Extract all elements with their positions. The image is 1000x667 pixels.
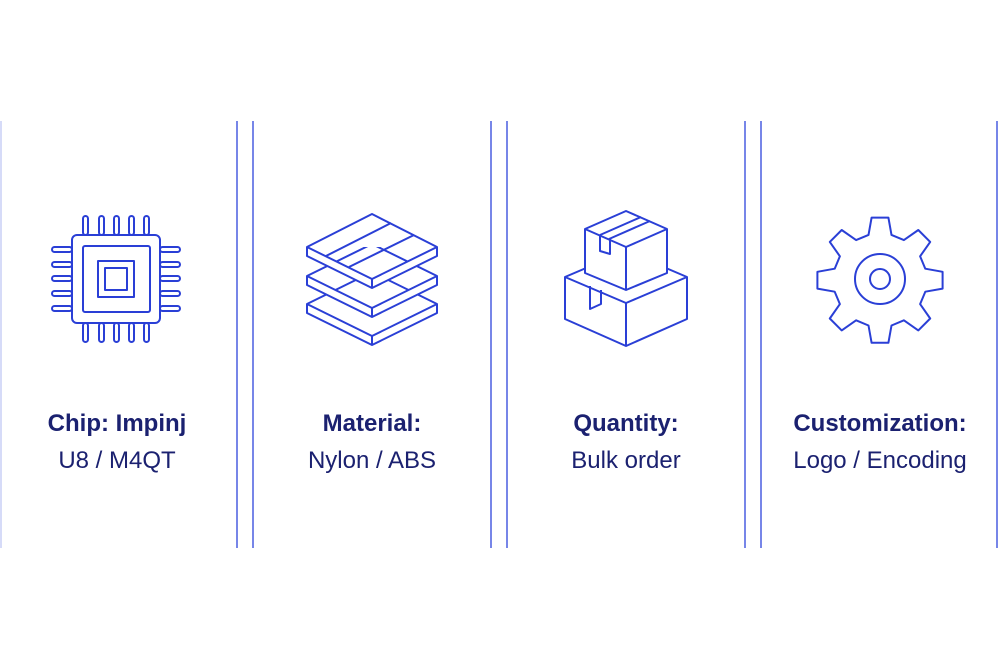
- text: chip: [48, 410, 186, 474]
- text: chip: U8 / M4QT: [58, 447, 176, 474]
- icon: gear: [817, 218, 943, 343]
- icon: chip: [52, 216, 180, 342]
- text: material: Nylon / ABS: [308, 447, 436, 474]
- text: material: [308, 410, 436, 474]
- text: customization: Customization:: [793, 410, 967, 437]
- text: chip: Chip: Impinj: [48, 410, 186, 437]
- text: quantity: [571, 410, 681, 474]
- icon: layers: [307, 214, 437, 345]
- text: material: Material:: [323, 410, 421, 437]
- text: quantity: Quantity:: [573, 410, 679, 437]
- text: quantity: Bulk order: [571, 447, 681, 474]
- text: customization: Logo / Encoding: [793, 447, 967, 474]
- text: customization: [793, 410, 967, 474]
- icon: boxes: [565, 211, 687, 346]
